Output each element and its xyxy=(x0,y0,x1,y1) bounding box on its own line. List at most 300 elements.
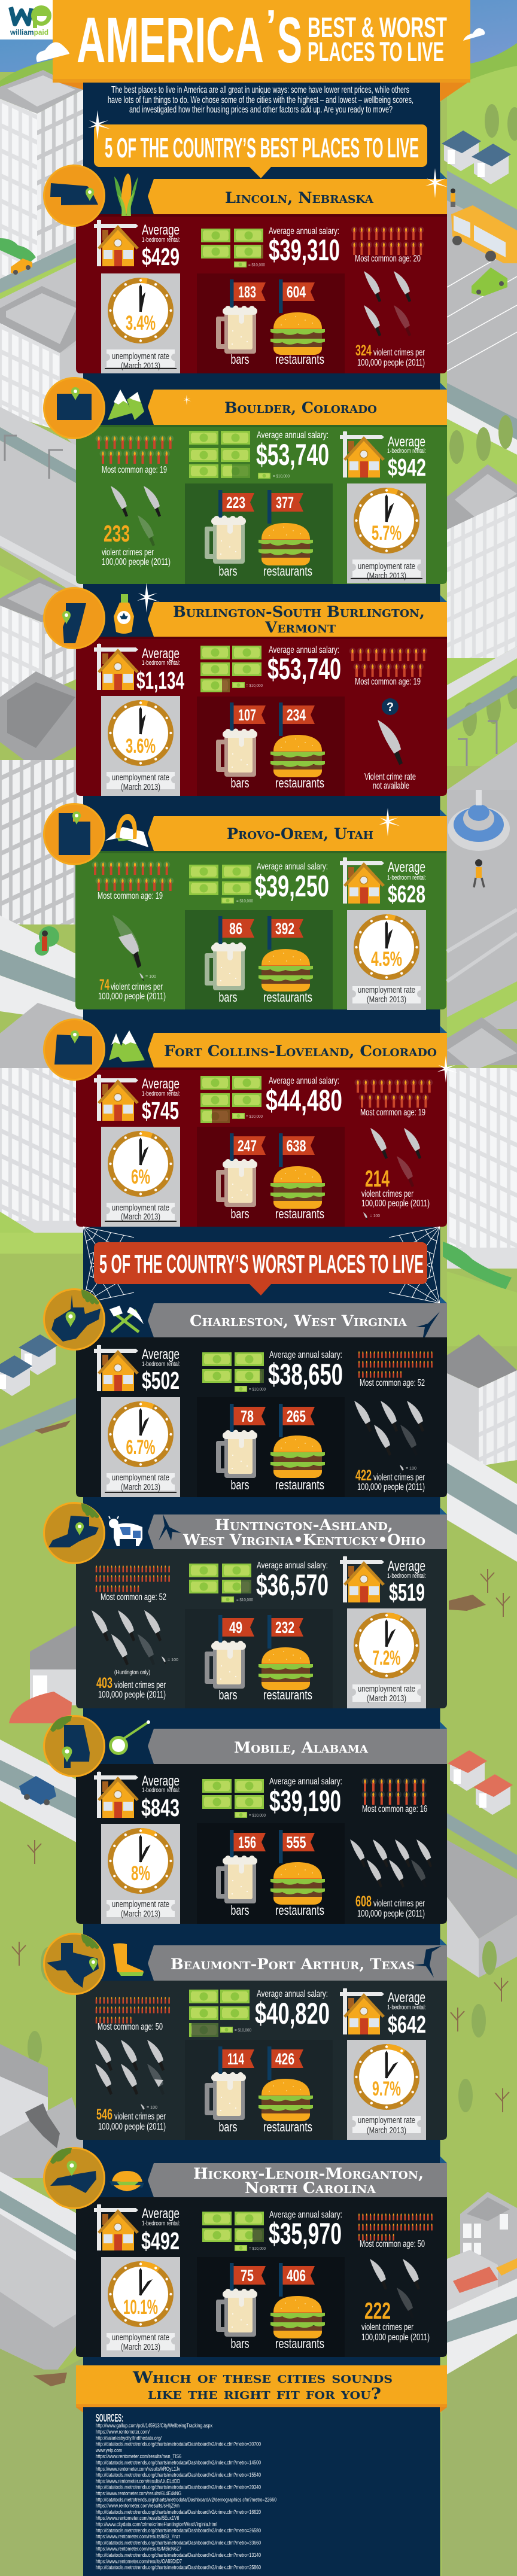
right houses xyxy=(442,130,511,184)
left building 3 xyxy=(0,577,83,703)
sources: http://salariesbycity.findthedata.org/ xyxy=(96,2435,162,2441)
icon: beer xyxy=(216,2288,257,2337)
salary bills: $38,650 xyxy=(268,1358,343,1391)
salary bills: = $10,000 xyxy=(236,1598,253,1602)
salary bills: Average annual salary: xyxy=(257,1989,328,1999)
house rental: 1-bedroom rental: xyxy=(387,1573,426,1580)
right road 2 xyxy=(447,383,517,440)
house rental: $745 xyxy=(142,1097,179,1124)
house rental: Average xyxy=(142,1773,180,1789)
age candles xyxy=(351,226,424,264)
violent crimes: violent crimes per xyxy=(373,1899,425,1909)
icon: Nebraska state badge xyxy=(43,165,105,227)
labels: restaurants xyxy=(275,1206,324,1221)
icon: beer xyxy=(216,729,257,777)
panel: bars and restaurants xyxy=(197,1823,345,1924)
left building 7 xyxy=(0,2044,83,2178)
house rental: 1-bedroom rental: xyxy=(142,1361,180,1368)
clock: unemployment xyxy=(101,2257,180,2357)
left building 4 xyxy=(0,671,83,924)
violent crimes: violent crimes per xyxy=(111,982,163,992)
flag: bars xyxy=(230,1133,266,1167)
flag: restaurants xyxy=(267,2046,303,2080)
flag: bars: 107 xyxy=(238,706,256,724)
salary bills: Average annual salary: xyxy=(269,2210,342,2220)
age candles: Most common age: 19 xyxy=(355,677,421,687)
panel background xyxy=(76,637,447,796)
violent crimes: 100,000 people (2011) xyxy=(98,2122,166,2132)
labels: restaurants xyxy=(263,564,312,579)
sources: http://datatools.metrotrends.org/charts/metrodata/Dashboard/v2/index.cfm?metro=14500 xyxy=(96,2459,261,2466)
panel: bars and restaurants xyxy=(185,483,333,584)
sources: http://datatools.metrotrends.org/charts/metrodata/Dashboard/v2/demographics.cfm?metro=22660 xyxy=(96,2496,276,2503)
age candles: Most common age: 20 xyxy=(355,254,421,264)
salary bills xyxy=(189,430,329,479)
salary bills: = $10,000 xyxy=(249,1814,266,1818)
salary bills: Average annual salary: xyxy=(269,1350,342,1360)
flag: restaurants xyxy=(267,490,303,524)
age candles xyxy=(349,647,427,687)
clock: unemployment xyxy=(101,1127,180,1227)
sources: http://datatools.metrotrends.org/charts/metrodata/Dashboard/v2/index.cfm?metro=13140 xyxy=(96,2552,261,2559)
ribbon: Vermont xyxy=(264,619,336,636)
subtitle xyxy=(308,11,447,67)
sources: http://www.citydata.com/crime/crimeHuntingtonWestVirginia.html xyxy=(96,2522,217,2528)
closing banner: Which of these cities sounds xyxy=(132,2369,393,2387)
age candles xyxy=(358,2213,433,2249)
clock: unemployment: 9.7% xyxy=(372,2078,401,2100)
house rental: Average xyxy=(388,434,425,450)
violent crimes: violent crimes per xyxy=(114,2112,166,2122)
ribbon xyxy=(148,382,447,425)
labels: bars xyxy=(231,1903,249,1918)
green strip xyxy=(447,981,517,1038)
icon: mountains xyxy=(108,390,144,420)
violent crimes xyxy=(102,486,171,567)
clock: unemployment: (March 2013) xyxy=(121,1212,160,1222)
house rental: Average xyxy=(388,1558,425,1574)
clock: unemployment: (March 2013) xyxy=(367,571,406,581)
icon: beer xyxy=(216,1855,257,1903)
violent crimes: = 100 xyxy=(168,1658,178,1662)
flag: bars: 86 xyxy=(229,920,242,938)
blue car xyxy=(19,1776,56,1805)
title: America's: S xyxy=(277,4,302,76)
violent crimes: 100,000 people (2011) xyxy=(361,2332,430,2343)
flag: bars xyxy=(230,1830,266,1863)
violent crimes: 214 xyxy=(365,1166,390,1192)
flag: restaurants xyxy=(279,1404,315,1437)
house rental: $502 xyxy=(142,1367,180,1394)
right road 4 xyxy=(447,1813,517,1870)
clock: unemployment: unemployment rate xyxy=(358,561,415,571)
flag: restaurants xyxy=(267,916,303,950)
violent crimes xyxy=(361,1128,430,1220)
logo: william paid xyxy=(0,0,53,39)
green car xyxy=(472,267,507,296)
labels: bars xyxy=(231,1206,249,1221)
sources: https://www.rentometer.com/results/UuELdDD xyxy=(96,2478,180,2484)
house rental: $429 xyxy=(142,243,180,270)
clock: unemployment: 6% xyxy=(131,1166,150,1188)
salary bills xyxy=(202,1777,342,1818)
labels xyxy=(219,2119,312,2134)
house rental xyxy=(94,1771,180,1821)
closing banner xyxy=(76,2365,447,2413)
violent crimes: 100,000 people (2011) xyxy=(98,1690,166,1700)
clock: unemployment: unemployment rate xyxy=(112,351,169,361)
sparkle xyxy=(437,1056,458,1082)
section: Boulder, Colorado xyxy=(43,377,447,584)
violent crimes: violent crimes per xyxy=(373,348,425,358)
violent crimes not available: Violent crime rate xyxy=(364,772,416,782)
panel background xyxy=(76,1981,447,2140)
right trees 3 xyxy=(463,676,517,736)
clock: unemployment: 6.7% xyxy=(126,1436,156,1459)
salary bills: $44,480 xyxy=(266,1084,342,1117)
flag: restaurants xyxy=(279,2263,315,2297)
panel: bars and restaurants xyxy=(185,1609,333,1708)
violent crimes: 100,000 people (2011) xyxy=(357,1909,425,1919)
violent crimes: = 100 xyxy=(145,975,156,979)
house rental: $942 xyxy=(388,454,426,481)
flag: bars xyxy=(230,1404,266,1437)
clock: unemployment: (March 2013) xyxy=(367,994,406,1005)
house rental xyxy=(94,643,184,694)
left road 6 xyxy=(0,2171,83,2268)
house rental: 1-bedroom rental: xyxy=(142,2220,180,2227)
salary bills: $35,970 xyxy=(269,2217,342,2250)
flag: bars xyxy=(218,490,254,524)
violent crimes: = 100 xyxy=(406,1467,416,1471)
clock: unemployment: 4.5% xyxy=(371,948,402,971)
sources: http://www.gallup.com/poll/145913/CityWellbeingTracking.aspx xyxy=(96,2423,212,2429)
labels xyxy=(231,775,324,790)
sparkle xyxy=(88,110,111,140)
violent crimes not available: ? xyxy=(387,701,394,714)
sources: www.yelp.com xyxy=(95,2447,122,2454)
yellow car xyxy=(11,258,32,275)
house rental xyxy=(340,857,426,908)
salary bills xyxy=(189,862,329,904)
house rental: $628 xyxy=(388,880,425,908)
age candles: Most common age: 50 xyxy=(98,2022,163,2032)
salary bills: = $10,000 xyxy=(249,2247,266,2251)
sources: http://datatools.metrotrends.org/charts/metrodata/Dashboard/v2/index.cfm?metro=26580 xyxy=(96,2528,261,2534)
labels xyxy=(231,1206,324,1221)
age candles: Most common age: 16 xyxy=(362,1804,427,1814)
ribbon: Beaumont-Port Arthur, Texas xyxy=(171,1955,415,1973)
labels: bars xyxy=(231,775,249,790)
clock: unemployment: (March 2013) xyxy=(121,1482,160,1492)
salary bills: $39,190 xyxy=(269,1784,341,1818)
violent crimes not available xyxy=(364,698,416,791)
flag: restaurants: 638 xyxy=(286,1137,306,1155)
house rental xyxy=(340,1556,426,1606)
labels: restaurants xyxy=(263,990,312,1005)
house rental: 1-bedroom rental: xyxy=(387,448,426,455)
right road xyxy=(447,171,517,236)
right building 10 xyxy=(447,1334,517,1466)
salary bills xyxy=(202,1350,343,1392)
salary bills: = $10,000 xyxy=(236,899,253,904)
red awning xyxy=(9,1692,72,1723)
labels: restaurants xyxy=(263,1687,312,1702)
ribbon: Boulder, Colorado xyxy=(224,399,377,416)
house rental: $642 xyxy=(388,2011,426,2038)
left road 4 xyxy=(0,1395,83,1447)
flag: bars: 183 xyxy=(238,283,256,301)
clock: unemployment: 3.4% xyxy=(126,312,156,334)
sources: http://datatools.metrotrends.org/charts/metrodata/Dashboard/v2/index.cfm?metro=33660 xyxy=(96,2539,261,2546)
clock: unemployment: unemployment rate xyxy=(112,1203,169,1213)
house rental: 1-bedroom rental: xyxy=(387,2004,426,2011)
left building 5 xyxy=(0,1003,83,1236)
violent crimes: = 100 xyxy=(370,1214,380,1218)
section: Fort Collins-Loveland, Colorado xyxy=(43,1018,458,1227)
right building 11 xyxy=(447,1840,517,1978)
sources: https://www.rentometer.com/results/MBicN6Z7 xyxy=(96,2546,181,2553)
house rental xyxy=(94,220,180,270)
spider webs xyxy=(83,1227,440,1303)
ribbon: Mobile, Alabama xyxy=(234,1739,369,1756)
flag: bars: 78 xyxy=(241,1407,254,1425)
sources: https://www.rentometer.com/results/OA89DtD7 xyxy=(96,2558,182,2565)
house rental xyxy=(94,2204,180,2255)
icon: corn xyxy=(114,173,138,216)
house rental: Average xyxy=(142,1346,180,1362)
violent crimes: 100,000 people (2011) xyxy=(357,1482,425,1492)
house rental: 1-bedroom rental: xyxy=(387,874,426,881)
salary bills: Average annual salary: xyxy=(257,862,328,872)
age candles: Most common age: 52 xyxy=(360,1378,425,1388)
panel: bars and restaurants xyxy=(185,910,333,1009)
house rental: Average xyxy=(388,1990,425,2006)
salary bills: = $10,000 xyxy=(246,1115,263,1119)
panel background xyxy=(76,2197,447,2357)
ribbon xyxy=(148,1722,447,1764)
flag: bars xyxy=(218,2046,254,2080)
salary bills: $53,740 xyxy=(267,652,341,686)
age candles xyxy=(92,862,174,901)
logo: william paid: williampaid xyxy=(10,28,48,37)
violent crimes: violent crimes per xyxy=(361,2322,413,2332)
clock: unemployment xyxy=(101,696,180,796)
sources: https://www.rentometer.com/results/5Eux1Vtl xyxy=(96,2515,179,2522)
clock: unemployment: (March 2013) xyxy=(121,361,160,371)
labels: restaurants xyxy=(275,1477,324,1492)
ribbon: Hickory-Lenoir-Morganton, xyxy=(193,2165,424,2182)
banner: best places xyxy=(94,124,427,178)
icon: burger xyxy=(270,1166,325,1209)
icon: beer xyxy=(216,1158,257,1207)
intro text: and investigated how their housing prices and other factors add up. Are you ready to move? xyxy=(129,105,393,115)
clock: unemployment: unemployment rate xyxy=(112,2332,169,2343)
flag: bars xyxy=(218,916,254,950)
panel background xyxy=(76,1764,447,1924)
flag: restaurants xyxy=(279,1133,315,1167)
violent crimes: 324 xyxy=(355,342,372,359)
icon: Utah state badge xyxy=(43,803,105,865)
salary bills: Average annual salary: xyxy=(269,645,339,655)
salary bills: $40,820 xyxy=(255,1997,330,2030)
clock: unemployment: unemployment rate xyxy=(358,1684,415,1694)
violent crimes not available: not available xyxy=(373,781,409,791)
icon: burger xyxy=(258,1647,313,1690)
clock: unemployment xyxy=(347,483,426,583)
sources: SOURCES: xyxy=(96,2412,123,2424)
icon: cow xyxy=(109,1516,142,1546)
icon: North Carolina state badge xyxy=(43,2147,105,2209)
salary bills: $53,740 xyxy=(256,438,329,472)
violent crimes xyxy=(98,915,166,1002)
icon: beer xyxy=(205,1641,246,1689)
salary bills xyxy=(189,1989,330,2037)
sources: http://datatools.metrotrends.org/charts/metrodata/Dashboard/v2/index.cfm?metro=39340 xyxy=(96,2484,261,2491)
salary bills: $36,570 xyxy=(256,1568,329,1602)
salary bills: = $10,000 xyxy=(249,1388,266,1392)
clock: unemployment: (March 2013) xyxy=(121,2342,160,2352)
violent crimes: 546 xyxy=(96,2106,112,2123)
clock: unemployment: (March 2013) xyxy=(367,1693,406,1704)
icon: tri-state badge xyxy=(43,1502,105,1564)
age candles: Most common age: 19 xyxy=(360,1108,425,1118)
clock: unemployment: unemployment rate xyxy=(112,1473,169,1483)
hills xyxy=(0,43,517,120)
title: America's: AMERICA xyxy=(77,4,264,76)
ribbon: Lincoln, Nebraska xyxy=(225,189,374,206)
sources: https://www.rentometer.com/results/sHIjZ9m xyxy=(96,2503,180,2510)
flag: bars: 247 xyxy=(238,1137,257,1155)
panel: bars and restaurants xyxy=(197,273,345,373)
clock: unemployment: unemployment rate xyxy=(358,2115,415,2125)
flag: restaurants xyxy=(279,702,315,736)
clock: unemployment xyxy=(101,1397,180,1497)
age candles: Most common age: 19 xyxy=(98,891,163,901)
icon: burger xyxy=(270,2296,325,2338)
closing banner: like the right fit for you? xyxy=(148,2385,381,2403)
icon: burger xyxy=(270,735,325,777)
labels xyxy=(219,990,312,1005)
right lawn xyxy=(447,66,517,215)
sources: http://datatools.metrotrends.org/charts/metrodata/Dashboard/v2/crime.cfm?metro=16620 xyxy=(96,2509,261,2516)
age candles: Most common age: 50 xyxy=(360,2239,425,2249)
icon: Alabama state badge xyxy=(43,1715,105,1777)
right road 5 xyxy=(447,2279,517,2374)
age candles xyxy=(358,1351,433,1388)
title: America's: ’ xyxy=(266,1,276,50)
house rental: Average xyxy=(388,859,425,875)
sources: https://www.rentometer.com/results/nwn_TlS6 xyxy=(96,2453,181,2460)
left building 6 xyxy=(30,1622,83,1705)
flag: bars xyxy=(218,1615,254,1649)
house rental: 1-bedroom rental: xyxy=(142,1787,180,1794)
sources xyxy=(95,2412,276,2571)
clock: unemployment xyxy=(347,2040,426,2140)
labels xyxy=(231,1477,324,1492)
ribbon: Burlington-South Burlington, xyxy=(173,603,425,621)
age candles xyxy=(96,436,174,475)
violent crimes xyxy=(355,271,425,368)
violent crimes: violent crimes per xyxy=(102,548,154,558)
left building 2 xyxy=(0,286,83,455)
salary bills xyxy=(200,645,341,692)
panel background xyxy=(75,851,446,1009)
violent crimes: = 100 xyxy=(147,2106,157,2110)
flag: restaurants: 555 xyxy=(286,1833,306,1851)
clock: unemployment: 8% xyxy=(131,1862,150,1885)
ribbon: Charleston, West Virginia xyxy=(190,1312,407,1330)
violent crimes: 608 xyxy=(355,1893,372,1910)
icon: burger xyxy=(258,2079,313,2121)
icon: arch xyxy=(105,814,148,847)
violent crimes: 422 xyxy=(355,1467,372,1484)
labels: bars xyxy=(231,1477,249,1492)
icon: beer xyxy=(216,305,257,354)
right trees 2 xyxy=(449,415,513,464)
icon: mountains xyxy=(109,1030,145,1062)
house rental: Average xyxy=(142,1076,180,1092)
icon: Colorado state badge xyxy=(43,1018,105,1081)
labels xyxy=(231,1903,324,1918)
clock: unemployment xyxy=(347,910,426,1010)
ribbon xyxy=(148,1938,447,1981)
icon: banjo xyxy=(109,1720,150,1755)
violent crimes xyxy=(361,2259,430,2343)
flag: bars xyxy=(230,279,266,313)
house rental: Average xyxy=(142,2206,180,2222)
salary bills: $39,250 xyxy=(255,869,329,903)
violent crimes: violent crimes per xyxy=(114,1680,166,1690)
icon: Colorado state badge xyxy=(43,377,105,439)
salary bills: = $10,000 xyxy=(246,684,263,688)
salary bills: $39,310 xyxy=(269,233,340,267)
icon: beer xyxy=(205,2072,246,2120)
ribbon xyxy=(148,808,447,851)
house rental xyxy=(340,1988,426,2038)
salary bills xyxy=(202,2210,342,2251)
ribbon: West Virginia•Kentucky•Ohio xyxy=(183,1531,425,1549)
violent crimes xyxy=(354,1401,425,1492)
flag: bars xyxy=(230,2263,266,2297)
lamp posts xyxy=(458,721,497,766)
violent crimes: 222 xyxy=(364,2298,391,2324)
panel: bars and restaurants xyxy=(197,2257,345,2357)
flag: restaurants: 426 xyxy=(275,2050,294,2068)
salary bills: Average annual salary: xyxy=(257,1561,328,1571)
house rental xyxy=(94,1074,180,1124)
salary bills: Average annual salary: xyxy=(257,430,329,440)
icon: burger xyxy=(258,523,313,565)
icon: Texas state badge xyxy=(43,1933,105,1995)
violent crimes: violent crimes per xyxy=(373,1473,425,1483)
icon: small burger xyxy=(110,2171,144,2191)
left road 3 xyxy=(0,916,83,981)
clock: unemployment: 10.1% xyxy=(123,2296,158,2319)
violent crimes: 100,000 people (2011) xyxy=(102,557,171,567)
icon: beer xyxy=(205,942,246,990)
icon: Vermont state badge xyxy=(43,587,105,649)
panel: bars and restaurants xyxy=(197,1127,345,1227)
clock: unemployment xyxy=(101,1824,180,1924)
left road 5 xyxy=(0,1739,83,1846)
violent crimes: 100,000 people (2011) xyxy=(361,1199,430,1209)
salary bills: = $10,000 xyxy=(235,2028,251,2033)
icon: burger xyxy=(270,1862,325,1905)
pedestrian xyxy=(474,859,484,887)
flag: restaurants: 406 xyxy=(287,2267,306,2285)
ribbon xyxy=(148,172,447,214)
